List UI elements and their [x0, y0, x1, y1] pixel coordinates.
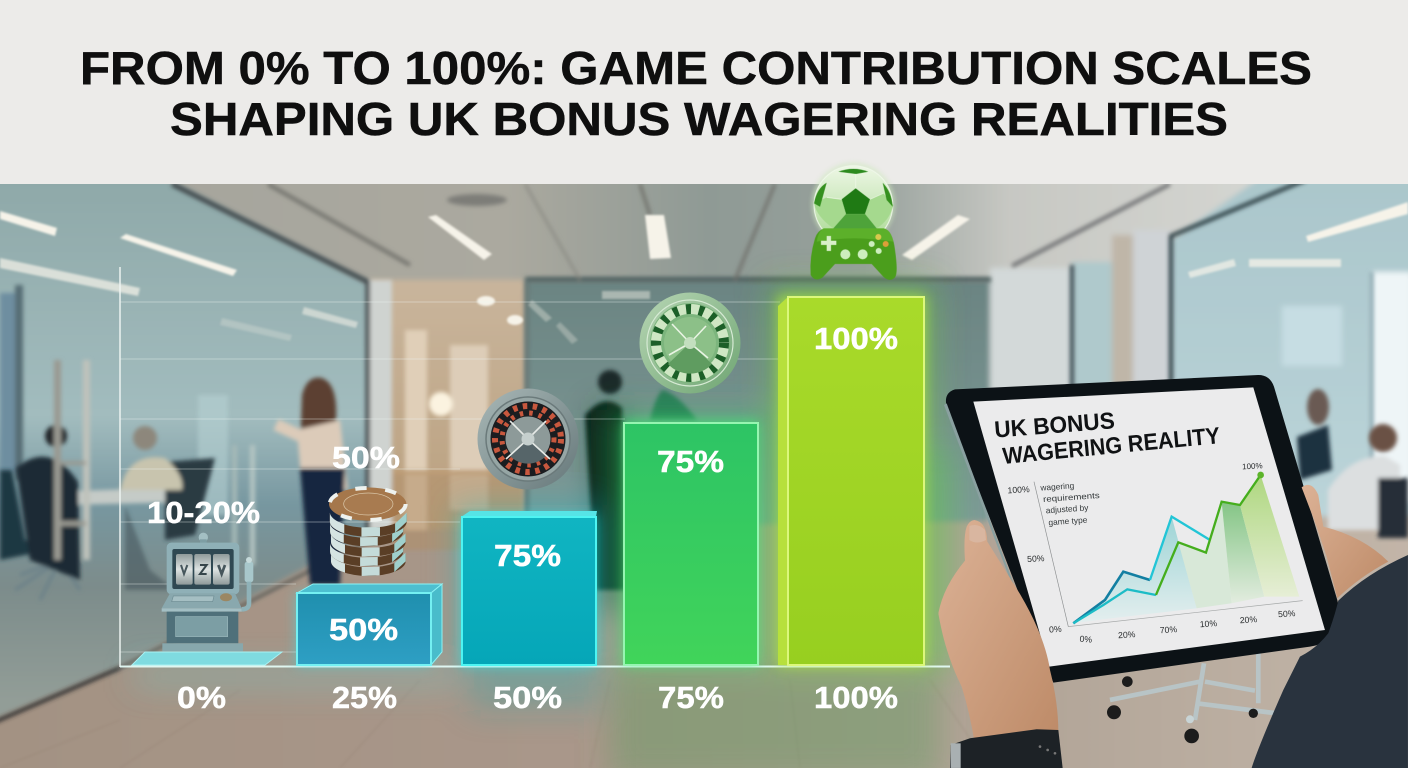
controller: [810, 228, 897, 280]
x-axis labels: 75%: [658, 680, 724, 715]
desk and chairs, left: [0, 458, 215, 600]
right hand gripping tablet: [1302, 485, 1388, 598]
centre glass room: [525, 280, 991, 540]
seated man, dark jacket: [16, 425, 80, 580]
tablet chart labels: 100%: [1242, 461, 1263, 471]
ceiling: [100, 150, 1300, 285]
title banner: [0, 0, 1408, 184]
icon: casino chip stack: [329, 487, 407, 576]
office chair under tablet: [1107, 653, 1280, 743]
tablet title: UK BONUS: [993, 407, 1116, 443]
tablet chart labels: 50%: [1278, 608, 1296, 619]
label: 10-20%: 10-20%: [147, 495, 260, 530]
left glass wall: [0, 150, 370, 725]
bar: 100%: [778, 295, 926, 666]
tablet chart labels: 100%: [1007, 484, 1030, 495]
bar: 75%: [623, 420, 759, 666]
background people: [0, 360, 1408, 600]
icon: green roulette wheel: [640, 292, 740, 394]
chart axes and gridlines: [120, 267, 950, 667]
tablet chart labels: 20%: [1239, 614, 1258, 625]
bar label: 100%: [814, 321, 898, 356]
standing man: [585, 370, 626, 590]
blurred architectural details: [0, 180, 1373, 724]
ceiling lights: [0, 202, 1408, 344]
wrist watch: [950, 729, 1063, 768]
football: [811, 162, 895, 246]
tablet line chart: [1034, 472, 1303, 627]
distant man, right: [1328, 424, 1408, 538]
person's sleeve: [1252, 555, 1408, 768]
label: 50% above chips: 50%: [332, 440, 400, 475]
colour glow spill from the bars: [135, 285, 955, 768]
x-axis labels: 0%: [177, 680, 226, 715]
tablet chart labels: 20%: [1118, 629, 1136, 640]
icon: football and game controller: [810, 162, 897, 280]
bar label: 75%: [657, 444, 724, 479]
title: line two: SHAPING UK BONUS WAGERING REALITIES: [170, 93, 1228, 145]
x-axis labels: 50%: [493, 680, 562, 715]
title: line one: FROM 0% TO 100%: GAME CONTRIBUTION SCALES: [80, 42, 1312, 94]
bar label: 50%: [329, 612, 398, 647]
x-axis labels: 100%: [814, 680, 898, 715]
tablet note text: game type: [1048, 515, 1088, 527]
x-axis labels: 25%: [332, 680, 397, 715]
tablet screen: [973, 387, 1325, 667]
tablet note text: requirements: [1043, 490, 1100, 504]
bar: 50%: [461, 511, 597, 666]
x-axis labels: [177, 680, 898, 715]
tablet body: [944, 375, 1339, 683]
thumbnail detail: [969, 525, 986, 542]
tablet title: WAGERING REALITY: [1001, 422, 1222, 469]
tablet note text: wagering: [1039, 480, 1075, 493]
standing woman: [273, 378, 348, 585]
bar: 0% slots: [132, 652, 282, 665]
tablet in hands: [938, 375, 1408, 768]
bar label: 75%: [494, 538, 561, 573]
tablet chart labels: 0%: [1049, 624, 1062, 635]
tablet chart labels: [1007, 461, 1296, 645]
tablet note text: adjusted by: [1045, 502, 1089, 515]
floor planks: [0, 680, 990, 768]
globe lamp: [429, 392, 453, 416]
faded person behind glass: [650, 390, 697, 420]
right wall and glass: [990, 150, 1408, 560]
distant woman, right: [1297, 389, 1332, 480]
warm corridor: [370, 280, 526, 550]
tablet chart labels: 70%: [1159, 624, 1178, 635]
bar: 25%: [296, 584, 442, 666]
tablet chart labels: 50%: [1027, 553, 1045, 564]
tablet note text: [1039, 480, 1100, 527]
tablet chart labels: 10%: [1199, 618, 1218, 629]
door handles: [54, 360, 90, 560]
icon: grey roulette wheel: [478, 388, 578, 490]
left hand holding tablet: [938, 520, 1058, 745]
tablet chart labels: 0%: [1079, 634, 1093, 645]
seated man, grey hair: [120, 426, 182, 490]
icon: slot machine: [162, 533, 253, 651]
wood floor: [0, 515, 1408, 768]
